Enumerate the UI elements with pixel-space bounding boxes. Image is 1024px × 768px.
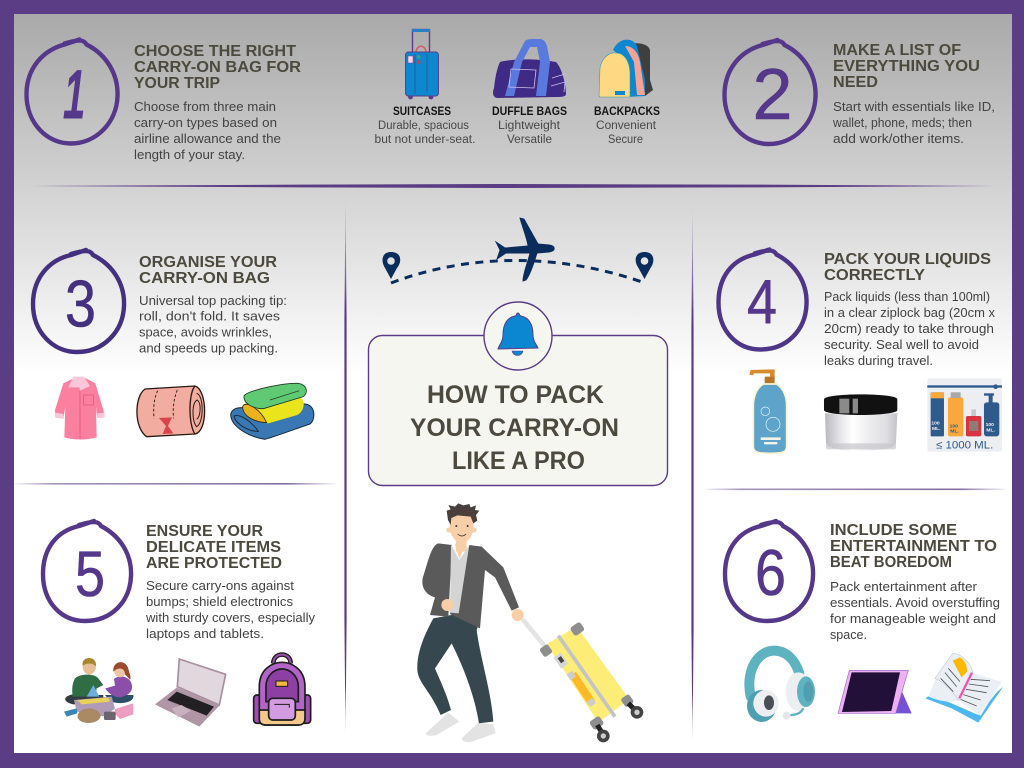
step number 6 [725,521,813,621]
step number 5: 5 [75,538,105,610]
step number 3: 3 [65,266,96,340]
icons: liquids [749,369,1002,453]
icon: ziplock bag [927,378,1002,452]
step number 6: 6 [755,536,786,609]
heading: INCLUDE SOME [830,522,957,539]
heading: ENSURE YOUR [146,523,263,540]
icon: pink shirt [55,377,105,439]
icon: ziplock bag: ML. [986,427,996,433]
body text: 20cm) ready to take through [824,321,994,336]
step number 1 [26,40,118,144]
label: duffle bags: DUFFLE BAGS [492,106,567,118]
body text: Choose from three main [134,99,276,114]
callout: title card [368,302,668,486]
body text [830,579,1000,642]
icon: folded towels [231,383,314,439]
icon: open book [925,653,1003,723]
body text: security. Seal well to avoid [824,337,979,352]
body text: add work/other items. [833,131,964,146]
body text: Pack entertainment after [830,579,978,594]
step number 3 [33,250,124,352]
icon: ziplock bag: ≤ 1000 ML. [936,439,993,451]
heading: CARRY-ON BAG [139,270,270,287]
body text: essentials. Avoid overstuffing [830,595,1000,610]
body text: Pack liquids (less than 100ml) [824,289,990,304]
body text: and speeds up packing. [139,340,278,356]
heading [139,254,277,287]
body text: airline allowance and the [134,131,281,146]
icon: backpack [599,40,653,97]
heading: DELICATE ITEMS [146,539,281,556]
body text: space. [830,627,867,642]
icons: delicate items [64,655,311,727]
title: LIKE A PRO [452,447,585,475]
heading [134,43,301,92]
body text: in a clear ziplock bag (20cm x [824,305,995,320]
icon: ziplock bag: 100 [950,423,958,429]
icon: couple packing suitcase [64,658,133,723]
icon: flight path with plane and pins [383,218,653,283]
icon: headphones [747,651,815,722]
step number 5 [43,521,131,621]
icon: ziplock bag: 100 [931,421,940,427]
label: suitcases: SUITCASES [393,106,451,118]
label: duffle bags [492,106,567,146]
step number 2: 2 [752,55,792,135]
body text: Start with essentials like ID, [833,99,995,114]
icon: man pulling yellow suitcase [417,503,643,742]
body text: space, avoids wrinkles, [139,324,272,340]
label: backpacks: BACKPACKS [594,106,660,118]
panel: step 2 make a list [724,40,995,146]
label: backpacks: Secure [608,134,643,146]
icon: bell [484,302,552,370]
heading: ENTERTAINMENT TO [830,538,997,555]
icons: entertainment [747,651,1003,723]
heading: ORGANISE YOUR [139,254,277,271]
icon: ziplock bag: ML. [932,426,941,432]
panel: centre title column [368,218,668,742]
panel: step 3 organise [33,250,314,439]
step number 1: 1 [60,58,91,132]
heading [830,522,997,571]
label: suitcases: but not under-seat. [374,134,476,146]
label: duffle bags: Versatile [507,134,552,146]
heading: EVERYTHING YOU [833,58,980,75]
step number 4: 4 [747,268,777,337]
body text: for manageable weight and [830,611,996,626]
body text: roll, don't fold. It saves [139,308,281,324]
heading: MAKE A LIST OF [833,42,961,59]
icon: purple backpack [254,655,311,725]
icon: cosmetic jar [824,394,897,451]
label: backpacks: Convenient [596,120,657,132]
icon: rolled shirt [137,386,205,437]
panel: step 5 delicate items [43,521,315,727]
body text [145,578,315,641]
panel: bag types [374,29,660,146]
heading: PACK YOUR LIQUIDS [824,251,991,268]
label: suitcases [374,106,476,146]
body text: length of your stay. [134,147,245,162]
heading [146,523,282,572]
step number 2 [724,40,816,144]
title: YOUR CARRY-ON [410,414,619,442]
title: HOW TO PACK [427,381,604,409]
icon: duffle bag [493,39,566,98]
label: suitcases: Durable, spacious [378,120,469,132]
heading: CORRECTLY [824,267,925,284]
body text [134,99,281,162]
icon: tablet [838,670,912,713]
body text: Universal top packing tip: [139,293,287,308]
icon: ziplock bag: ML. [950,429,960,435]
icon: laptop [155,659,226,727]
body text: wallet, phone, meds; then [832,115,972,130]
icon: ziplock bag: 100 [986,422,994,428]
body text: with sturdy covers, especially [145,610,315,625]
icon: suitcase [406,29,438,99]
title [410,381,619,475]
heading [824,251,991,284]
panel: step 4 liquids [718,250,1002,453]
body text [824,289,995,368]
heading: ARE PROTECTED [146,555,282,572]
heading: CARRY-ON BAG FOR [134,59,301,76]
icon: pump bottle [749,369,787,453]
body text: laptops and tablets. [146,626,264,641]
heading: BEAT BOREDOM [830,554,952,571]
body text: Secure carry-ons against [146,578,294,593]
body text: leaks during travel. [824,353,933,368]
body text [832,99,995,146]
body text [139,293,287,356]
body text: carry-on types based on [134,115,277,130]
step number 4 [718,250,807,350]
heading: CHOOSE THE RIGHT [134,43,296,60]
heading [833,42,980,91]
icons: clothes [55,377,314,439]
label: backpacks [594,106,660,146]
heading: YOUR TRIP [134,75,220,92]
body text: bumps; shield electronics [146,594,293,609]
panel: step 1 choose bag [26,40,301,162]
heading: NEED [833,74,878,91]
panel: step 6 entertainment [725,521,1003,723]
label: duffle bags: Lightweight [498,120,561,132]
